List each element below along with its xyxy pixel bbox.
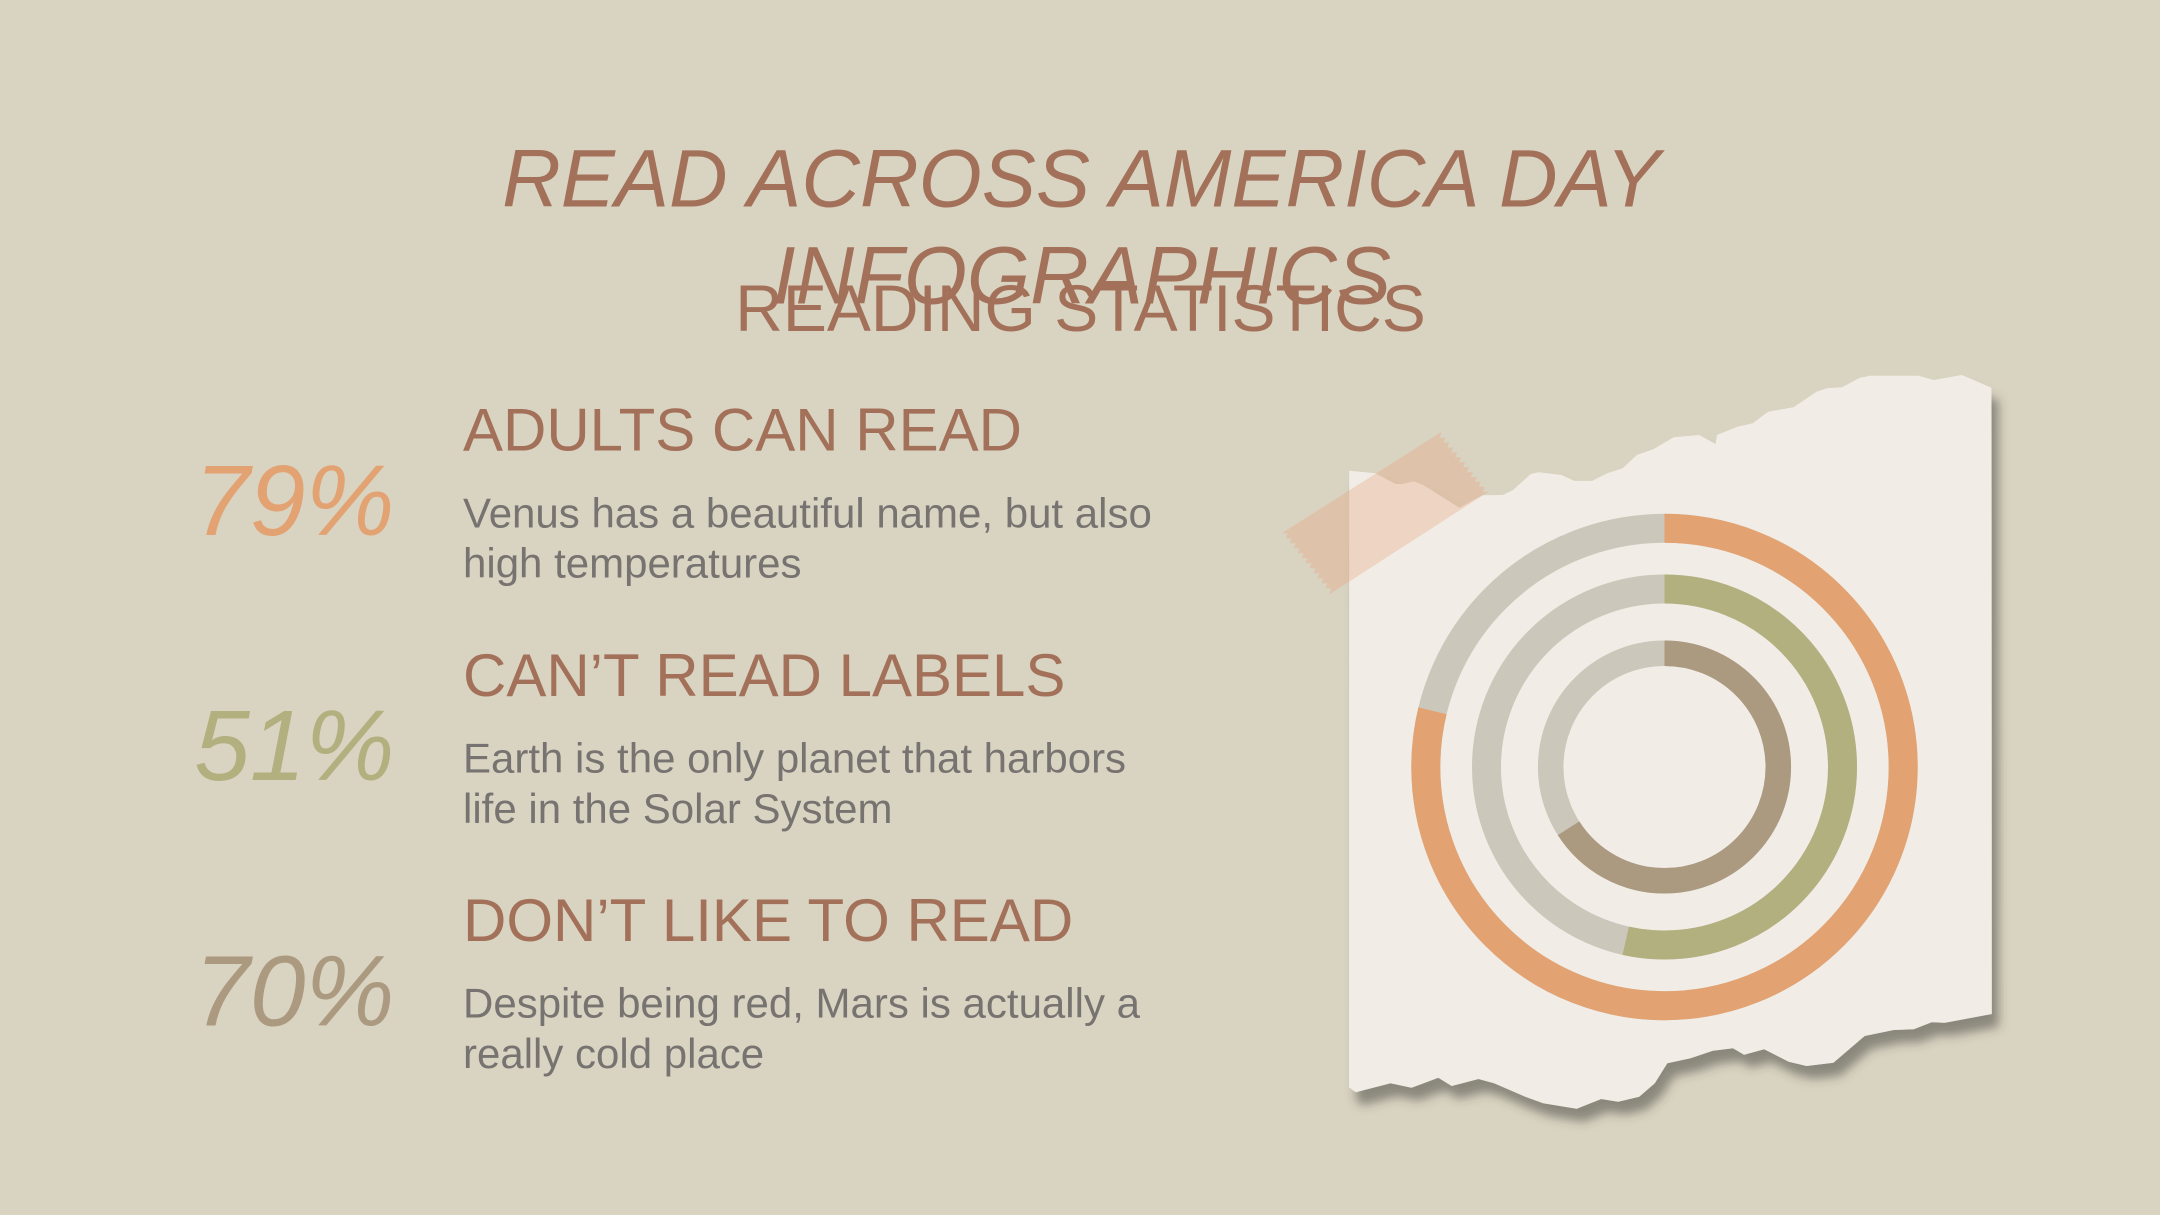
description: venus: high temperatures [463, 540, 802, 587]
percentage: 79%: 79% [194, 445, 394, 557]
radial bar chart [1426, 528, 1903, 1006]
percentage: 51%: 51% [194, 690, 394, 802]
subtitle: READING STATISTICS [735, 271, 1426, 345]
outer ring: 79% [1426, 528, 1903, 1006]
description: mars [463, 980, 1141, 1077]
stat row: adults can read [194, 397, 1152, 587]
title: READ ACROSS AMERICA DAY [502, 135, 1666, 225]
description: earth: Earth is the only planet that harbors [463, 734, 1126, 782]
description: venus: Venus has a beautiful name, but also [463, 489, 1152, 536]
heading: adults can read: ADULTS CAN READ [463, 397, 1022, 464]
description: venus [463, 489, 1152, 587]
stat row: don't like to read [194, 887, 1141, 1077]
heading: don't like to read: DON’T LIKE TO READ [463, 887, 1073, 954]
torn paper panel [1349, 375, 1992, 1109]
description: mars: Despite being red, Mars is actually a [463, 980, 1141, 1027]
percentage: 70%: 70% [194, 935, 394, 1047]
heading: can't read labels: CAN’T READ LABELS [463, 642, 1065, 709]
description: earth: life in the Solar System [463, 785, 893, 832]
masking tape [1282, 432, 1488, 594]
description: earth [463, 734, 1126, 832]
title [502, 135, 1666, 321]
stat row: can't read labels [194, 642, 1126, 832]
inner ring: 70% [1551, 653, 1778, 881]
title: INFOGRAPHICS [773, 231, 1391, 321]
description: mars: really cold place [463, 1030, 764, 1077]
middle ring: 51% [1486, 589, 1842, 945]
